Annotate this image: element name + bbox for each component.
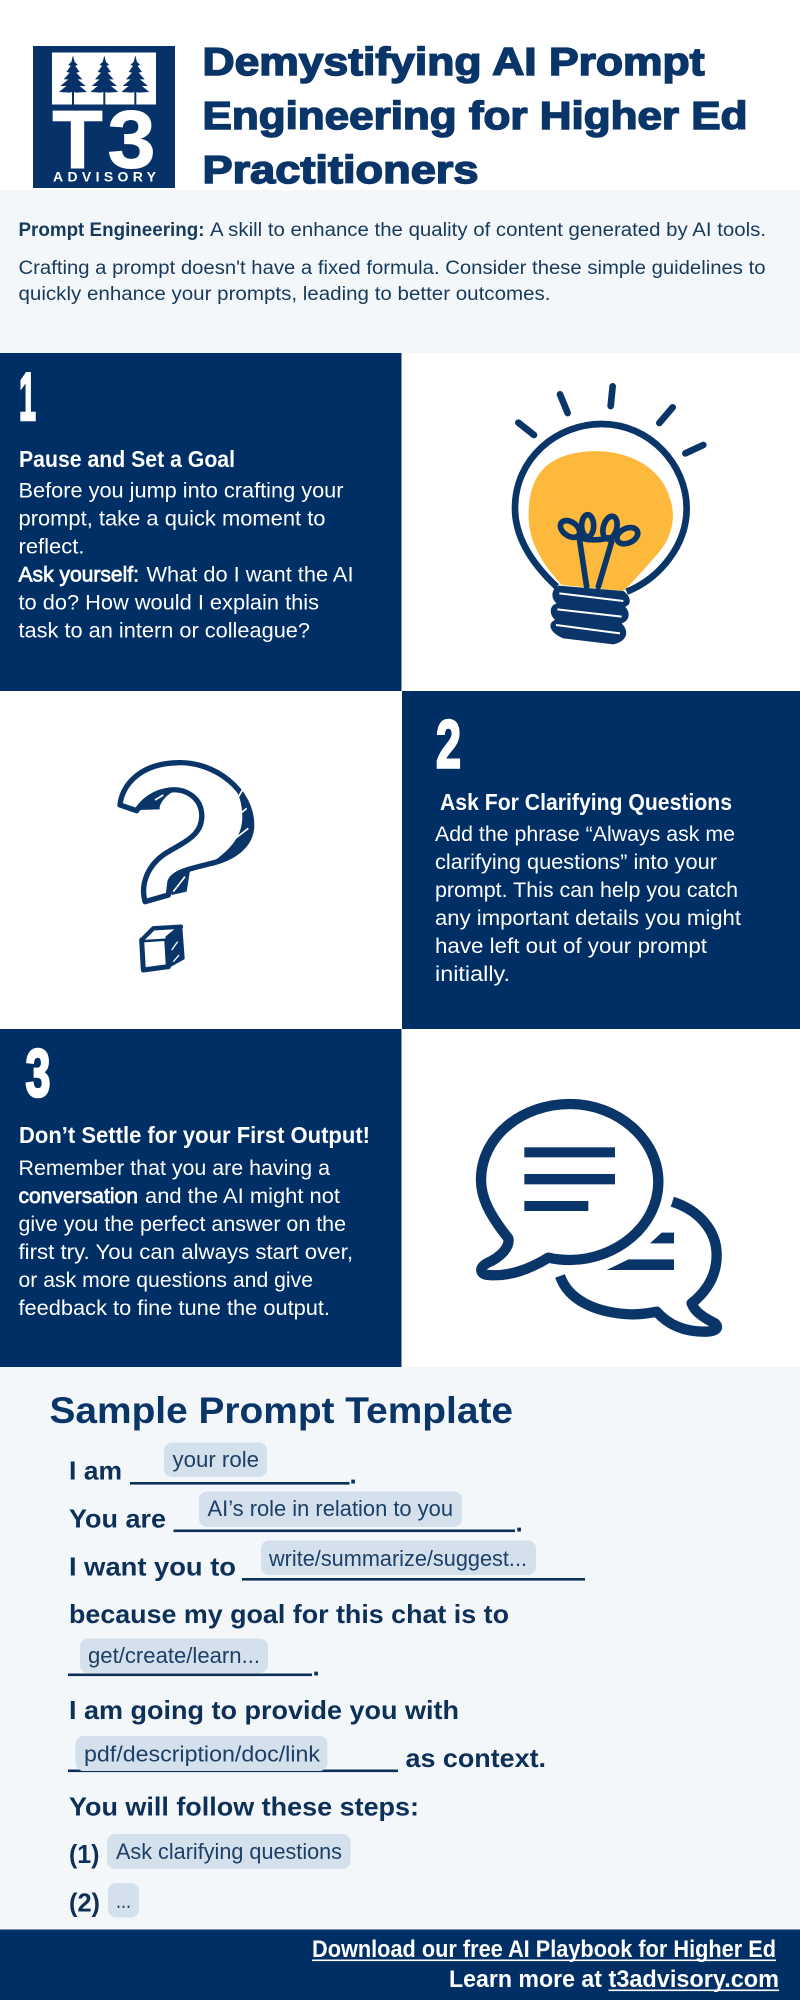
panel: step 1 [0, 353, 402, 691]
link: website: Learn more at [449, 1966, 602, 1993]
text block: definition: Prompt Engineering: [18, 220, 204, 241]
link: website [449, 1966, 779, 1993]
text block: step 1: Before you jump into crafting your [18, 478, 343, 502]
icon: question mark [120, 763, 252, 970]
template line: You are [69, 1492, 523, 1538]
text block: step 3: first try. You can always start over, [18, 1240, 353, 1264]
text block: definition: Crafting a prompt doesn't have a fixed formula. Consider these simple guidelines to [18, 258, 766, 279]
logo: T3 Advisory: 3 [108, 94, 156, 186]
text block: step 3: Remember that you are having a [18, 1156, 330, 1180]
chip: AI's role: AI’s role in relation to you [208, 1496, 453, 1521]
text block: step 1: task to an intern or colleague? [18, 618, 310, 642]
step (1): (1) [69, 1839, 100, 1869]
chip: write/summarize/suggest: write/summarize/suggest... [268, 1546, 527, 1571]
title: Engineering for Higher Ed [202, 95, 748, 138]
text block: step 1: Ask yourself: [18, 562, 139, 586]
panel: step 1: 1 [19, 359, 36, 435]
chip: write/summarize/suggest [261, 1540, 536, 1575]
text block: step 2 [435, 822, 741, 986]
template line: provide context: as context. [406, 1743, 546, 1773]
title: Practitioners [202, 149, 478, 192]
step (2) [69, 1883, 139, 1918]
text block: definition: quickly enhance your prompts, leading to better outcomes. [18, 284, 550, 305]
chip: AI's role [199, 1492, 462, 1527]
text block: definition: A skill to enhance the quality of content generated by AI tools. [210, 220, 766, 241]
template line: I am: I am [69, 1456, 122, 1486]
text block: step 3: and the AI might not [145, 1184, 340, 1208]
title [202, 41, 748, 192]
step (1): Ask clarifying questions [116, 1839, 342, 1864]
template line: I am [69, 1442, 357, 1490]
heading: step 3: Don’t Settle for your First Output! [19, 1122, 370, 1148]
text block: step 2: Add the phrase “Always ask me [435, 822, 735, 846]
text block: step 2: prompt. This can help you catch [435, 878, 738, 902]
template line: because my goal: because my goal for this chat is to [69, 1599, 509, 1629]
template line: because my goal: . [312, 1652, 320, 1682]
text block: step 1: to do? How would I explain this [18, 590, 319, 614]
step (2): ... [116, 1888, 131, 1913]
heading: sample prompt template: Sample Prompt Template [50, 1390, 513, 1431]
template line: I want you to: I want you to [69, 1552, 236, 1582]
text block: definition [18, 220, 766, 305]
text block: step 1: prompt, take a quick moment to [18, 506, 326, 530]
text block: step 3: feedback to fine tune the output. [18, 1296, 330, 1320]
step number 3: 3 [26, 1035, 50, 1111]
heading: step 2: Ask For Clarifying Questions [440, 789, 732, 815]
step (1) [69, 1834, 350, 1869]
panel: sample prompt template [0, 1367, 800, 1930]
icon: speech bubbles [481, 1104, 717, 1332]
template line: steps: You will follow these steps: [69, 1792, 419, 1822]
link: website: t3advisory.com [608, 1966, 779, 1993]
template line: provide context [68, 1695, 546, 1773]
logo: T3 Advisory: ADVISORY [53, 168, 157, 184]
panel: step 2 [402, 691, 800, 1029]
text block: step 2: have left out of your prompt [435, 934, 707, 958]
logo: T3 Advisory: T [52, 94, 102, 186]
template line: provide context: I am going to provide you with [69, 1695, 459, 1725]
text block: step 3: give you the perfect answer on the [18, 1212, 346, 1236]
panel: step 3 [0, 1029, 402, 1367]
text block: step 3: or ask more questions and give [18, 1268, 313, 1292]
template line: You are: You are [69, 1504, 166, 1534]
logo: T3 Advisory [33, 46, 175, 188]
text block: step 1: What do I want the AI [146, 562, 354, 586]
text block: step 3 [18, 1156, 353, 1320]
heading: step 1: Pause and Set a Goal [19, 446, 235, 472]
step number 2: 2 [436, 706, 461, 782]
panel: introduction [0, 190, 800, 353]
template line: I want you to [69, 1540, 585, 1582]
icon: light bulb [515, 386, 703, 644]
chip: your role [164, 1442, 267, 1477]
chip: your role: your role [172, 1447, 259, 1472]
title: Demystifying AI Prompt [202, 41, 705, 84]
chip: pdf/description/doc/link [76, 1736, 328, 1771]
template line: because my goal [68, 1599, 509, 1682]
footer [0, 1930, 800, 2000]
text block: step 3: conversation [18, 1184, 138, 1208]
chip: pdf/description/doc/link: pdf/description/doc/link [84, 1742, 321, 1766]
text block: step 2: initially. [435, 962, 510, 986]
step (2): (2) [69, 1888, 100, 1918]
chip: get/create/learn [80, 1638, 268, 1673]
template line: I am: . [350, 1460, 357, 1490]
chip: get/create/learn: get/create/learn... [88, 1643, 260, 1668]
template line: You are: . [516, 1508, 523, 1538]
text block: step 1 [18, 478, 354, 642]
text block: step 2: clarifying questions” into your [435, 850, 717, 874]
text block: step 2: any important details you might [435, 906, 741, 930]
icon: three pine trees [59, 55, 149, 107]
text block: step 1: reflect. [18, 534, 84, 558]
